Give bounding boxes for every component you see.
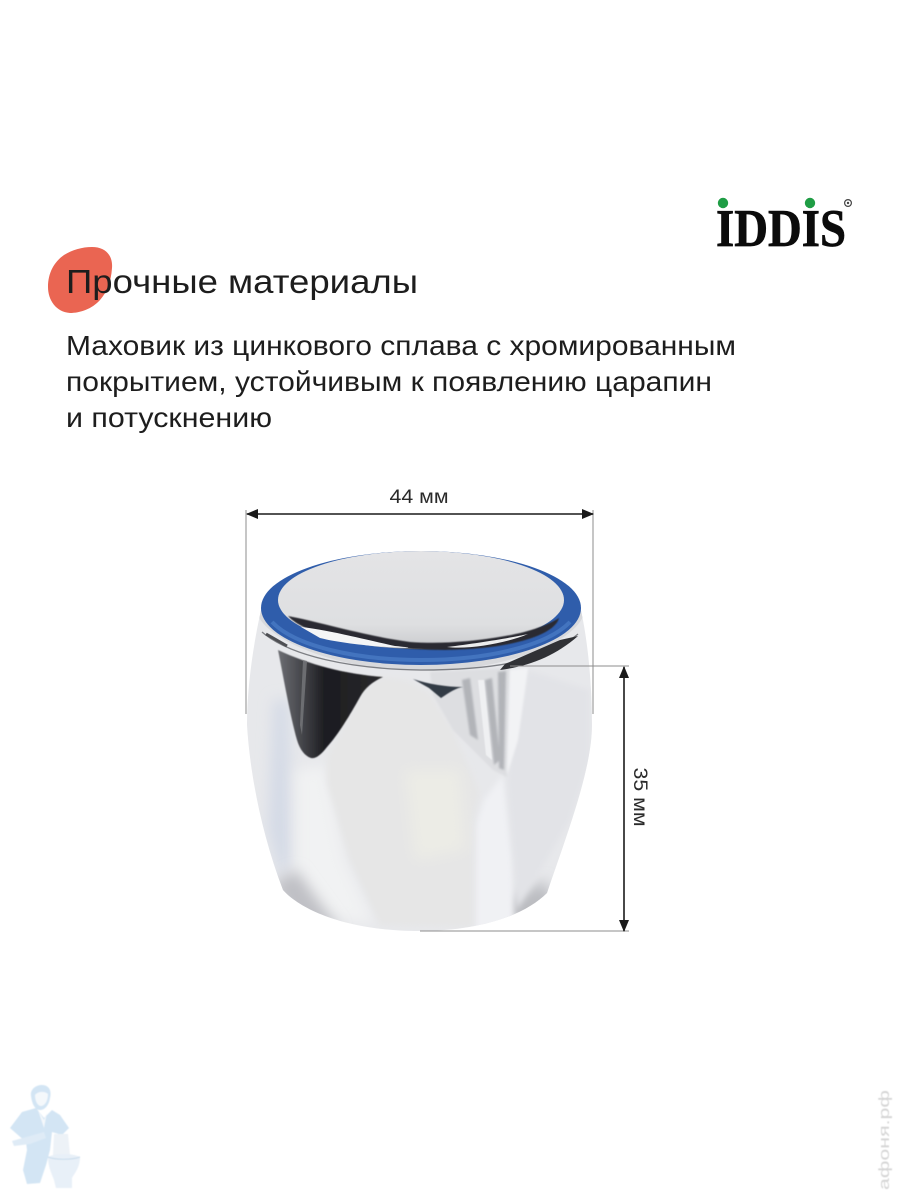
heading with red blob accent [48, 247, 418, 313]
description text [66, 330, 736, 433]
watermark: site name: афоня.рф [876, 1090, 893, 1190]
dimension: width 44 mm: 44 мм [390, 487, 448, 508]
description text: и потускнению [66, 402, 272, 433]
logo: IDDIS: IDDIS [716, 200, 846, 258]
product photo: chrome handwheel with blue ring [247, 551, 592, 931]
icon: plumber mascot with toilet [10, 1085, 80, 1188]
heading with red blob accent: Прочные материалы [66, 263, 418, 300]
dimension: height 35 mm [420, 666, 650, 931]
description text: Маховик из цинкового сплава с хромированным [66, 330, 736, 361]
dimension: width 44 mm [246, 487, 593, 714]
dimension: height 35 mm: 35 мм [629, 768, 650, 826]
description text: покрытием, устойчивым к появлению царапин [66, 366, 712, 397]
